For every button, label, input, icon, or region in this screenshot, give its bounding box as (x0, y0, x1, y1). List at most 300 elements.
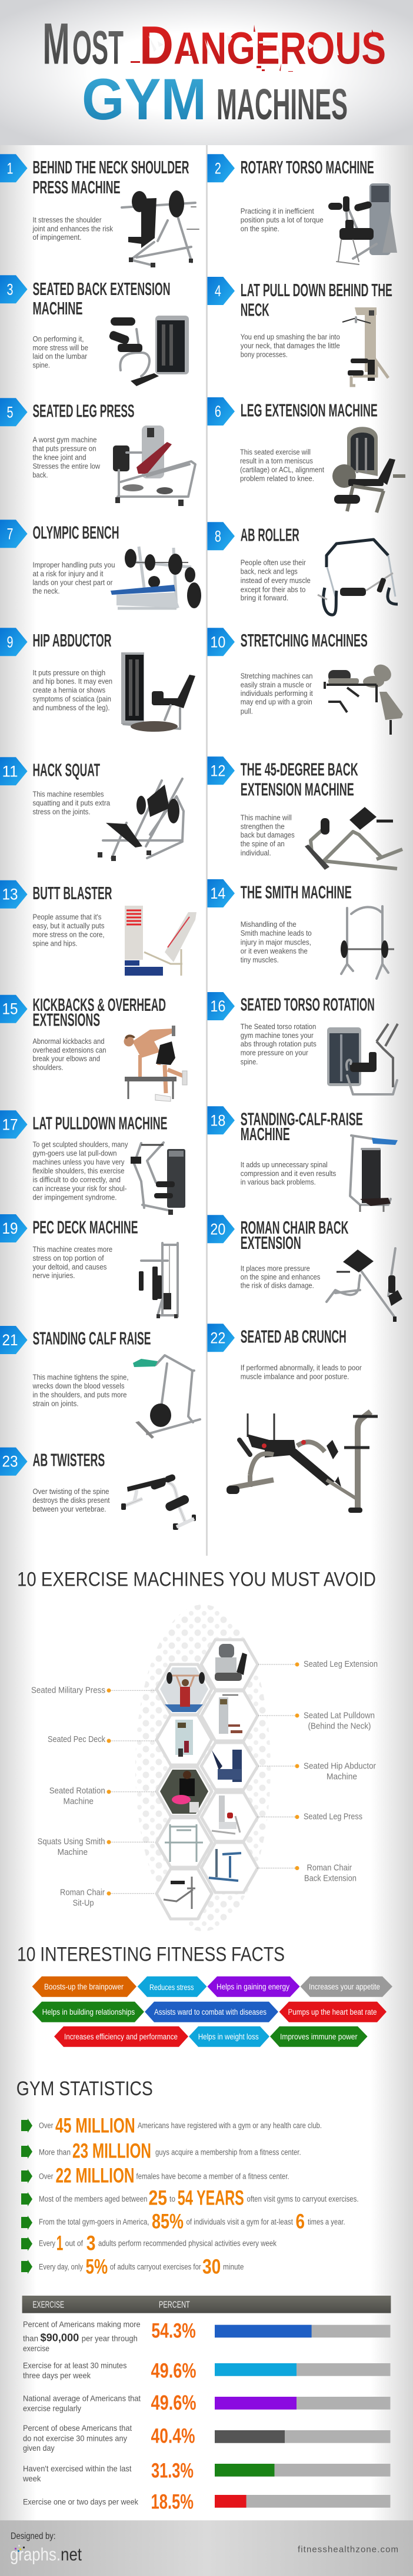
labels left: Sit-Up (73, 1899, 94, 1908)
hex: roman chair back extension (201, 1843, 258, 1892)
stat 4: 25 (148, 2187, 167, 2210)
description 2: on the spine. (241, 225, 279, 233)
icon: olympic bench (111, 547, 201, 608)
description 2 (241, 207, 324, 233)
stat 3: females have become a member of a fitness center. (136, 2172, 289, 2181)
description 6: (cartilage) or ACL, alignment (240, 465, 324, 474)
stat 2 (21, 2140, 301, 2163)
labels left: Seated Military Press (31, 1686, 105, 1696)
heading 3: MACHINE (33, 298, 82, 319)
description 3: laid on the lumbar (33, 353, 87, 361)
row 3: 49.6% (151, 2391, 196, 2414)
labels right: (Behind the Neck) (308, 1721, 371, 1731)
description 7 (33, 561, 115, 595)
badge 5: 5 (7, 403, 13, 421)
pill: efficiency (54, 2026, 188, 2047)
description 17: To get sculpted shoulders, many (33, 1141, 128, 1149)
badge 15 (0, 995, 28, 1023)
panel: machine 1 (0, 154, 199, 267)
description 18 (241, 1161, 336, 1187)
row 6: 18.5% (151, 2491, 194, 2514)
heading: fitness facts: 10 INTERESTING FITNESS FACTS (17, 1944, 285, 1966)
badge 10: 10 (210, 633, 225, 651)
heading 3 (33, 279, 171, 319)
description 17: flexible shoulders, this exercise (33, 1167, 125, 1175)
description 11: This machine resembles (33, 790, 104, 799)
pill: stress (138, 1977, 207, 1997)
icon: lat pull down machine (342, 307, 388, 386)
heading 18: MACHINE (241, 1124, 290, 1144)
panel: machine 8 (207, 522, 398, 615)
heading 1: BEHIND THE NECK SHOULDER (33, 157, 189, 177)
title: Gym: GYM (82, 66, 206, 132)
labels right: Seated Lat Pulldown (304, 1711, 375, 1720)
icon: ab roller (318, 540, 398, 615)
stat 6 (21, 2232, 277, 2255)
stat 6: adults perform recommended physical activities every week (98, 2239, 277, 2248)
badge 23: 23 (2, 1453, 18, 1470)
description 10: may end up with a groin (241, 698, 312, 706)
description 3: spine. (33, 361, 50, 370)
description 16: spine. (241, 1058, 258, 1066)
row 5: Haven't exercised within the last (23, 2464, 132, 2473)
hex: seated military press (156, 1664, 212, 1714)
icon: seated ab crunch machine (227, 1412, 378, 1513)
description 1 (32, 216, 114, 242)
row 2: 49.6% (151, 2359, 196, 2382)
pill: appetite: Increases your appetite (309, 1982, 380, 1991)
pill: heart rate: Pumps up the heart beat rate (288, 2008, 377, 2016)
row 3 (23, 2391, 391, 2414)
description 15: shoulders. (33, 1063, 64, 1071)
panel: machine 13 (0, 880, 196, 976)
pill: diseases: Assists ward to combat with diseases (154, 2008, 267, 2016)
row 4: do not exercise 30 minutes any (23, 2433, 127, 2443)
hex: seated rotation (156, 1767, 212, 1816)
icon: pec deck machine (139, 1243, 178, 1318)
description 20: the risk of disks damage. (241, 1282, 314, 1290)
description 23: destroys the disks present (33, 1496, 110, 1505)
description 16: The Seated torso rotation (241, 1023, 316, 1031)
panel: machine 22 (207, 1324, 378, 1513)
panel: machine 9 (0, 628, 195, 732)
stat 4: Most of the members aged between (39, 2195, 147, 2203)
heading 8: AB ROLLER (241, 525, 299, 545)
panel: machine 5 (0, 398, 195, 506)
description 13 (33, 913, 105, 947)
panel: machine 10 (207, 628, 403, 735)
description 10: pull. (241, 707, 253, 715)
header panel (0, 0, 413, 145)
labels left (31, 1686, 155, 1908)
description 15 (33, 1037, 106, 1071)
labels right: Seated Leg Extension (304, 1660, 378, 1669)
stat 6: Every (39, 2239, 55, 2248)
stat 1 (21, 2114, 322, 2137)
description 13: more stress on the core, (33, 930, 105, 939)
description 8: People often use their (241, 559, 306, 567)
stat 5: From the total gym-goers in America, (39, 2217, 149, 2226)
description 11: stress on the joints. (33, 808, 91, 816)
description 21 (32, 1374, 129, 1408)
description 4: bony processes. (241, 351, 288, 359)
stat 1: 45 MILLION (55, 2114, 135, 2137)
description 6: This seated exercise will (240, 448, 311, 456)
badge 20 (207, 1215, 235, 1243)
table header (22, 2296, 391, 2313)
heading: gym statistics: GYM STATISTICS (16, 2078, 153, 2100)
description 19: nerve injuries. (33, 1272, 75, 1280)
panel: machine 14 (207, 879, 394, 979)
description 20 (241, 1264, 320, 1290)
panel: hexagon diagram (31, 1604, 378, 1931)
heading 12 (241, 759, 358, 799)
description 18: compression and it even results (241, 1170, 336, 1178)
description 3 (33, 335, 88, 370)
heading 23: AB TWISTERS (33, 1449, 105, 1470)
designed by label: Designed by: (11, 2531, 55, 2541)
source url: fitnesshealthzone.com (298, 2545, 398, 2555)
description 20: It places more pressure (241, 1264, 310, 1272)
labels right: Back Extension (304, 1874, 357, 1883)
heading 7: OLYMPIC BENCH (33, 522, 119, 543)
row 2 (23, 2359, 391, 2382)
stat 1: Americans have registered with a gym or any health care club. (138, 2121, 322, 2130)
description 18: It adds up unnecessary spinal (241, 1161, 328, 1169)
stat 7 (21, 2255, 244, 2278)
description 14: Smith machine leads to (241, 929, 312, 937)
description 12: the spine of an (241, 840, 285, 848)
badge 17: 17 (2, 1116, 18, 1133)
description 8: instead of every muscle (241, 577, 311, 585)
description 9: and hip bones. It may even (33, 678, 112, 686)
badge 9 (0, 628, 28, 656)
description 17: der impingement syndrome. (33, 1194, 116, 1202)
description 10 (241, 672, 313, 715)
description 16: gym machine tones your (241, 1031, 314, 1040)
description 3: On performing it, (33, 335, 84, 343)
icon: leg extension machine (332, 427, 405, 512)
stat 2: More than (39, 2148, 71, 2156)
description 16: abs through rotation puts (241, 1040, 317, 1049)
labels left: Machine (58, 1848, 88, 1857)
badge 1: 1 (7, 159, 13, 177)
row 6 (23, 2491, 391, 2514)
pill: brainpower: Boosts-up the brainpower (44, 1982, 124, 1991)
stat 2: 23 MILLION (72, 2140, 151, 2163)
description 21: in the shoulders, and puts more (33, 1391, 127, 1399)
panel: machine 2 (207, 154, 397, 264)
badge 23 (0, 1448, 28, 1476)
pill: appetite (300, 1977, 392, 1997)
stat 4 (21, 2187, 359, 2210)
stat 4: to (169, 2195, 175, 2203)
pill: brainpower (32, 1977, 136, 1997)
panel: machine 21 (0, 1326, 200, 1439)
badge 22: 22 (210, 1329, 225, 1346)
panel: statistics list (21, 2114, 359, 2278)
heading 19: PEC DECK MACHINE (33, 1217, 138, 1237)
description 17: gym-goers use lat pull-down (33, 1150, 117, 1158)
stat 3: 22 MILLION (55, 2164, 134, 2187)
description 2: position puts a lot of torque (241, 216, 324, 224)
panel: machine 6 (207, 397, 405, 512)
pill: energy: Helps in gaining energy (217, 1982, 289, 1991)
badge 18: 18 (210, 1111, 225, 1129)
icon: hack squat machine (98, 779, 184, 861)
stat 7: Every day, only (39, 2262, 83, 2271)
panel: machine 20 (207, 1215, 402, 1322)
heading 9: HIP ABDUCTOR (33, 630, 112, 651)
badge 21: 21 (2, 1331, 18, 1349)
description 19 (33, 1245, 112, 1280)
row 2: three days per week (23, 2371, 91, 2380)
heading 15: EXTENSIONS (33, 1010, 100, 1030)
heading 20: EXTENSION (241, 1232, 301, 1253)
icon: stretching machine (325, 661, 403, 735)
badge 3: 3 (7, 280, 13, 298)
description 10: Stretching machines can (241, 672, 313, 680)
description 9: create a hernia or shows (33, 686, 105, 695)
description 13: easy, but it actually puts (33, 922, 105, 930)
description 1: of impingement. (33, 233, 81, 242)
labels left: Seated Rotation (49, 1786, 105, 1796)
row 4 (23, 2423, 391, 2453)
badge 22 (207, 1324, 235, 1352)
row 4: 40.4% (151, 2425, 195, 2448)
row 6: Exercise one or two days per week (23, 2497, 139, 2507)
heading 20 (241, 1217, 349, 1253)
heading 11: HACK SQUAT (33, 760, 100, 780)
description 21: wrecks down the blood vessels (32, 1382, 125, 1391)
description 16 (241, 1023, 317, 1066)
icon: standing calf raise machine (350, 1135, 398, 1212)
description 14 (241, 920, 312, 964)
description 13: People assume that it's (33, 913, 101, 922)
description 22 (241, 1364, 362, 1381)
description 4: your neck, that damages the little (241, 342, 340, 350)
icon: graphs.net pixels (15, 2545, 25, 2552)
panel: machine 18 (207, 1106, 398, 1212)
description 19: stress on top portion of (33, 1254, 104, 1262)
badge 12: 12 (210, 762, 225, 779)
description 5: the knee joint and (33, 454, 86, 462)
stat 5: of individuals visit a gym for at-least (186, 2217, 293, 2226)
description 10: individuals performing it (241, 689, 313, 698)
stat 7: 30 (202, 2255, 221, 2278)
title: Most (42, 11, 124, 76)
pill: efficiency: Increases efficiency and performance (64, 2032, 178, 2041)
description 23: between your vertebrae. (33, 1505, 106, 1513)
badge 9: 9 (7, 633, 13, 651)
badge 4: 4 (215, 282, 221, 300)
logo: graphs.net: graphs.net (10, 2544, 82, 2565)
badge 11: 11 (2, 762, 18, 780)
title: Most: OST (72, 21, 124, 74)
heading 3: SEATED BACK EXTENSION (33, 279, 171, 299)
badge 17 (0, 1110, 28, 1138)
description 11: squatting and it puts extra (33, 799, 110, 808)
description 9: It puts pressure on thigh (33, 669, 105, 677)
description 7: at a risk for injury and it (33, 570, 104, 578)
stat 6: out of (65, 2239, 83, 2248)
icon: seated back extension machine (108, 316, 189, 386)
panel: machine 7 (0, 520, 201, 608)
description 11 (33, 790, 110, 816)
description 6: problem related to knee. (240, 474, 314, 483)
badge 19 (0, 1214, 28, 1242)
panel: machine 23 (0, 1448, 196, 1530)
badge 2: 2 (215, 159, 221, 177)
labels left: Seated Pec Deck (48, 1735, 106, 1744)
badge 2 (207, 154, 235, 182)
heading 13: BUTT BLASTER (33, 883, 112, 903)
panel: machine 11 (0, 757, 184, 861)
row 1: exercise (23, 2344, 49, 2353)
description 4 (241, 333, 340, 359)
heading 15: KICKBACKS & OVERHEAD (33, 994, 166, 1015)
title: Most: M (42, 11, 69, 76)
description 12: This machine will (241, 813, 292, 822)
description 5: Stresses the entire low (33, 463, 101, 471)
description 5: back. (33, 471, 48, 480)
row 1: 54.3% (151, 2319, 196, 2342)
description 21: This machine tightens the spine, (33, 1374, 128, 1382)
stat 5: times a year. (308, 2217, 345, 2226)
labels right: Seated Hip Abductor (304, 1761, 376, 1771)
description 4: You end up smashing the bar into (241, 333, 340, 341)
labels right: Machine (327, 1772, 357, 1781)
stat 4: 54 YEARS (178, 2187, 244, 2210)
badge 3 (0, 275, 28, 303)
heading 17: LAT PULLDOWN MACHINE (33, 1113, 167, 1134)
badge 1 (0, 154, 28, 182)
row 1 (23, 2319, 391, 2353)
description 6: result in a torn meniscus (240, 457, 313, 465)
stat 7: minute (223, 2262, 244, 2271)
badge 16 (207, 992, 235, 1020)
hex: pec deck (156, 1715, 212, 1765)
badge 13: 13 (2, 886, 18, 903)
row 4: Percent of obese Americans that (23, 2423, 132, 2433)
stat 2: guys acquire a membership from a fitness center. (155, 2148, 301, 2156)
description 21: strain on joints. (33, 1399, 79, 1408)
description 23: Over twisting of the spine (33, 1488, 109, 1496)
heading 21: STANDING CALF RAISE (33, 1328, 151, 1349)
stat 1: Over (39, 2121, 54, 2130)
description 22: muscle imbalance and poor posture. (241, 1373, 349, 1381)
stat 6: 1 (56, 2232, 63, 2255)
badge 8: 8 (215, 527, 221, 545)
heading 18 (241, 1108, 363, 1144)
row 3: exercise regularly (23, 2404, 81, 2413)
row 5: 31.3% (151, 2460, 194, 2483)
description 17: can increase your risk for shoul- (33, 1185, 127, 1193)
badge 6 (207, 397, 235, 426)
pill: immune power: Improves immune power (280, 2032, 358, 2041)
pill: relationships: Helps in building relationships (42, 2008, 135, 2016)
pill: weight loss: Helps in weight loss (198, 2032, 259, 2041)
description 3: more stress will be (33, 344, 88, 352)
description 5: A worst gym machine (33, 436, 97, 444)
table header: PERCENT (159, 2300, 190, 2310)
badge 6: 6 (215, 403, 221, 420)
icon: ab twister bench (121, 1473, 196, 1530)
description 8 (241, 559, 311, 602)
heading 4: NECK (241, 299, 269, 320)
description 1: It stresses the shoulder (33, 216, 101, 224)
heading 1 (33, 157, 189, 197)
description 7: lands on your chest part or (33, 579, 113, 587)
panel: machine 3 (0, 275, 189, 386)
pill: heart rate (279, 2002, 387, 2022)
description 10: easily strain a muscle or (241, 681, 312, 689)
icon: rotary torso machine (328, 183, 397, 264)
stat 7: of adults carryout exercises for (110, 2262, 201, 2271)
icon: seated leg press machine (113, 426, 195, 506)
stat 4: often visit gyms to carryout exercises. (247, 2195, 359, 2203)
stat 6: 3 (86, 2232, 95, 2255)
description 14: injury in major muscles, (241, 939, 311, 947)
title: Dangerous: D (139, 15, 174, 75)
badge 14: 14 (210, 885, 225, 902)
description 12: back but damages (241, 831, 295, 839)
description 15: overhead extensions can (33, 1046, 106, 1054)
badge 13 (0, 880, 28, 909)
icon: standing calf raise machine (133, 1355, 200, 1439)
icon: seated torso rotation machine (327, 1024, 398, 1094)
panel: machine 4 (207, 277, 392, 386)
description 15: Abnormal kickbacks and (33, 1037, 105, 1046)
stat 7: 5% (86, 2255, 108, 2278)
labels left: Squats Using Smith (38, 1837, 105, 1847)
badge 15: 15 (2, 1000, 18, 1018)
pill: energy (207, 1977, 300, 1997)
description 17 (33, 1141, 128, 1202)
description 23 (33, 1488, 110, 1513)
panel: footer (0, 2520, 413, 2576)
description 5: that puts pressure on (33, 445, 96, 453)
hex: hip abductor (201, 1743, 258, 1790)
description 15: break your elbows and (33, 1055, 100, 1063)
row 1: per year through (82, 2333, 138, 2343)
badge 5 (0, 398, 28, 426)
icon: lat pulldown machine (131, 1143, 185, 1215)
labels right: Roman Chair (307, 1863, 352, 1872)
description 17: machines unless you have very (33, 1158, 125, 1167)
row 3: National average of Americans that (23, 2394, 141, 2403)
icon: 45-degree back extension (305, 807, 402, 870)
icon: hip abductor machine (121, 652, 195, 732)
icon: man doing dumbbell kickback (124, 1026, 187, 1101)
labels right (257, 1660, 378, 1883)
panel: machine 12 (207, 756, 402, 870)
row 4: given day (23, 2443, 55, 2453)
badge 19: 19 (2, 1220, 18, 1237)
stat 5: 85% (152, 2210, 184, 2233)
row 5 (22, 2460, 390, 2483)
pill: diseases (145, 2002, 278, 2022)
description 9: symptoms of sciatica (pain (33, 695, 111, 703)
description 22: If performed abnormally, it leads to poor (241, 1364, 362, 1372)
description 12: individual. (241, 849, 271, 857)
description 14: or it even weakens the (241, 947, 308, 955)
description 16: more pressure on your (241, 1049, 308, 1057)
hex: leg press (201, 1793, 258, 1841)
description 7: the neck. (33, 587, 60, 595)
badge 12 (207, 756, 235, 785)
description 17: is difficult to do correctly, and (33, 1176, 121, 1184)
